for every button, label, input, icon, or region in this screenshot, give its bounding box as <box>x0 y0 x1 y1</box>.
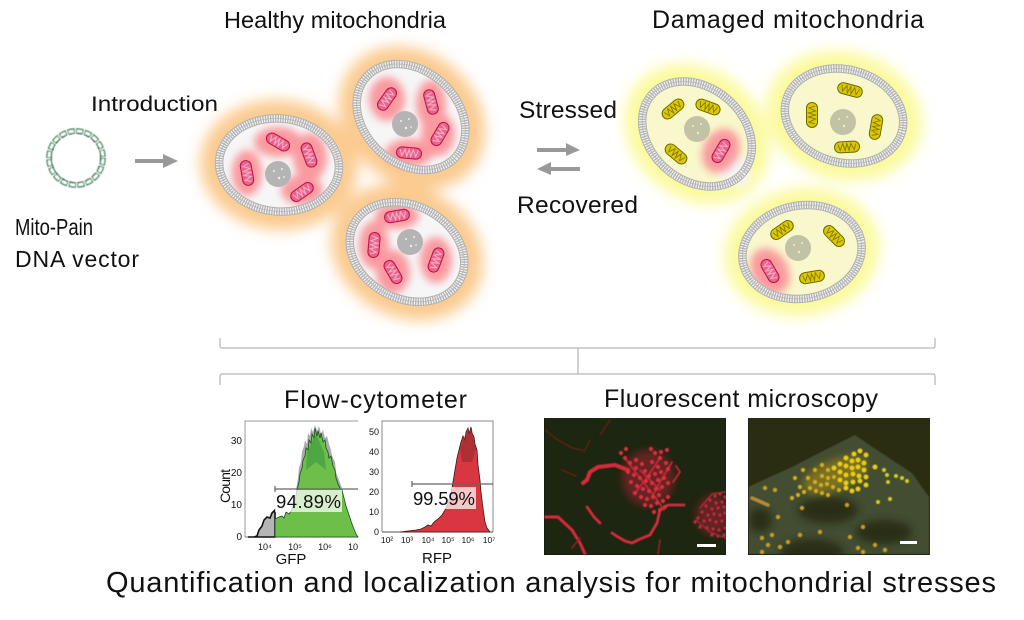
chart: GFP histogram: 94.89% <box>276 491 341 512</box>
axis title: GFP: GFP <box>276 551 306 568</box>
cell: damaged bottom <box>735 196 869 308</box>
chart: RFP histogram: 20 <box>369 487 379 497</box>
label: Mito-Pain DNA vector: Mito-Pain <box>15 214 93 240</box>
arrows: reversible <box>537 143 580 175</box>
chart: GFP histogram: 10⁶ <box>318 542 332 552</box>
axis title: RFP: RFP <box>422 550 452 567</box>
chart: RFP histogram: 10⁴ <box>421 535 435 545</box>
chart: RFP histogram: 10⁶ <box>462 535 474 545</box>
chart: GFP histogram: 20 <box>231 468 242 479</box>
panel: healthy cells <box>195 17 514 346</box>
chart: GFP histogram: 10⁵ <box>288 542 302 552</box>
title: damaged mitochondria: Damaged mitochondria <box>652 6 924 34</box>
cell: top <box>335 42 487 192</box>
label: introduction: Introduction <box>91 93 218 116</box>
chart: RFP histogram: 10² <box>381 535 393 545</box>
chart: RFP histogram: 10⁷ <box>483 535 495 545</box>
heading: fluorescent microscopy: Fluorescent microscopy <box>604 385 878 413</box>
chart: GFP histogram: 10 <box>348 542 358 552</box>
chart: GFP histogram: 30 <box>231 436 242 447</box>
arrow: introduction <box>135 154 178 168</box>
orange glow <box>195 17 514 346</box>
micrograph: damaged yellow mitochondria <box>748 418 930 567</box>
outline population <box>296 425 342 490</box>
chart: RFP histogram: 10 <box>369 507 379 517</box>
heading: flow cytometer: Flow-cytometer <box>284 386 467 414</box>
scale bar <box>697 544 716 547</box>
scale bar <box>900 541 917 544</box>
micrograph: healthy red mitochondria <box>544 418 732 555</box>
cell: damaged right <box>774 56 914 176</box>
bracket: upper and lower <box>220 338 935 385</box>
chart: RFP histogram: 10⁵ <box>442 535 454 545</box>
label: Mito-Pain DNA vector: DNA vector <box>15 246 139 272</box>
chart: GFP histogram: 10⁴ <box>258 542 272 552</box>
chart: RFP histogram: 10³ <box>401 535 413 545</box>
label: recovered: Recovered <box>517 192 638 219</box>
axis title: count: Count <box>217 469 233 503</box>
chart: GFP histogram <box>217 421 358 568</box>
cell: bottom <box>332 183 482 321</box>
chart: RFP histogram: 0 <box>374 527 379 537</box>
label: stressed: Stressed <box>519 97 617 124</box>
yellow glow <box>596 34 937 329</box>
chart: RFP histogram: 40 <box>369 447 379 457</box>
panel: damaged cells <box>596 34 937 329</box>
label: Mito-Pain DNA vector <box>15 214 139 272</box>
chart: RFP histogram <box>369 421 495 567</box>
negative population <box>248 510 275 537</box>
chart: GFP histogram: 10 <box>231 500 242 511</box>
title: healthy mitochondria: Healthy mitochondria <box>224 7 447 33</box>
red population <box>400 427 490 532</box>
cell: left <box>215 113 343 217</box>
chart: GFP histogram: 0 <box>236 532 242 543</box>
cell: damaged left <box>621 60 773 208</box>
positive population <box>275 428 358 537</box>
gate and label <box>412 487 476 509</box>
caption: quantification: Quantification and localization analysis for mitochondrial stresses <box>106 567 996 599</box>
chart: RFP histogram: 30 <box>369 467 379 477</box>
chart: RFP histogram: 99.59% <box>413 488 475 509</box>
icon: DNA vector plasmid <box>49 131 103 185</box>
chart: RFP histogram: 50 <box>369 427 379 437</box>
gate and label <box>275 490 342 512</box>
